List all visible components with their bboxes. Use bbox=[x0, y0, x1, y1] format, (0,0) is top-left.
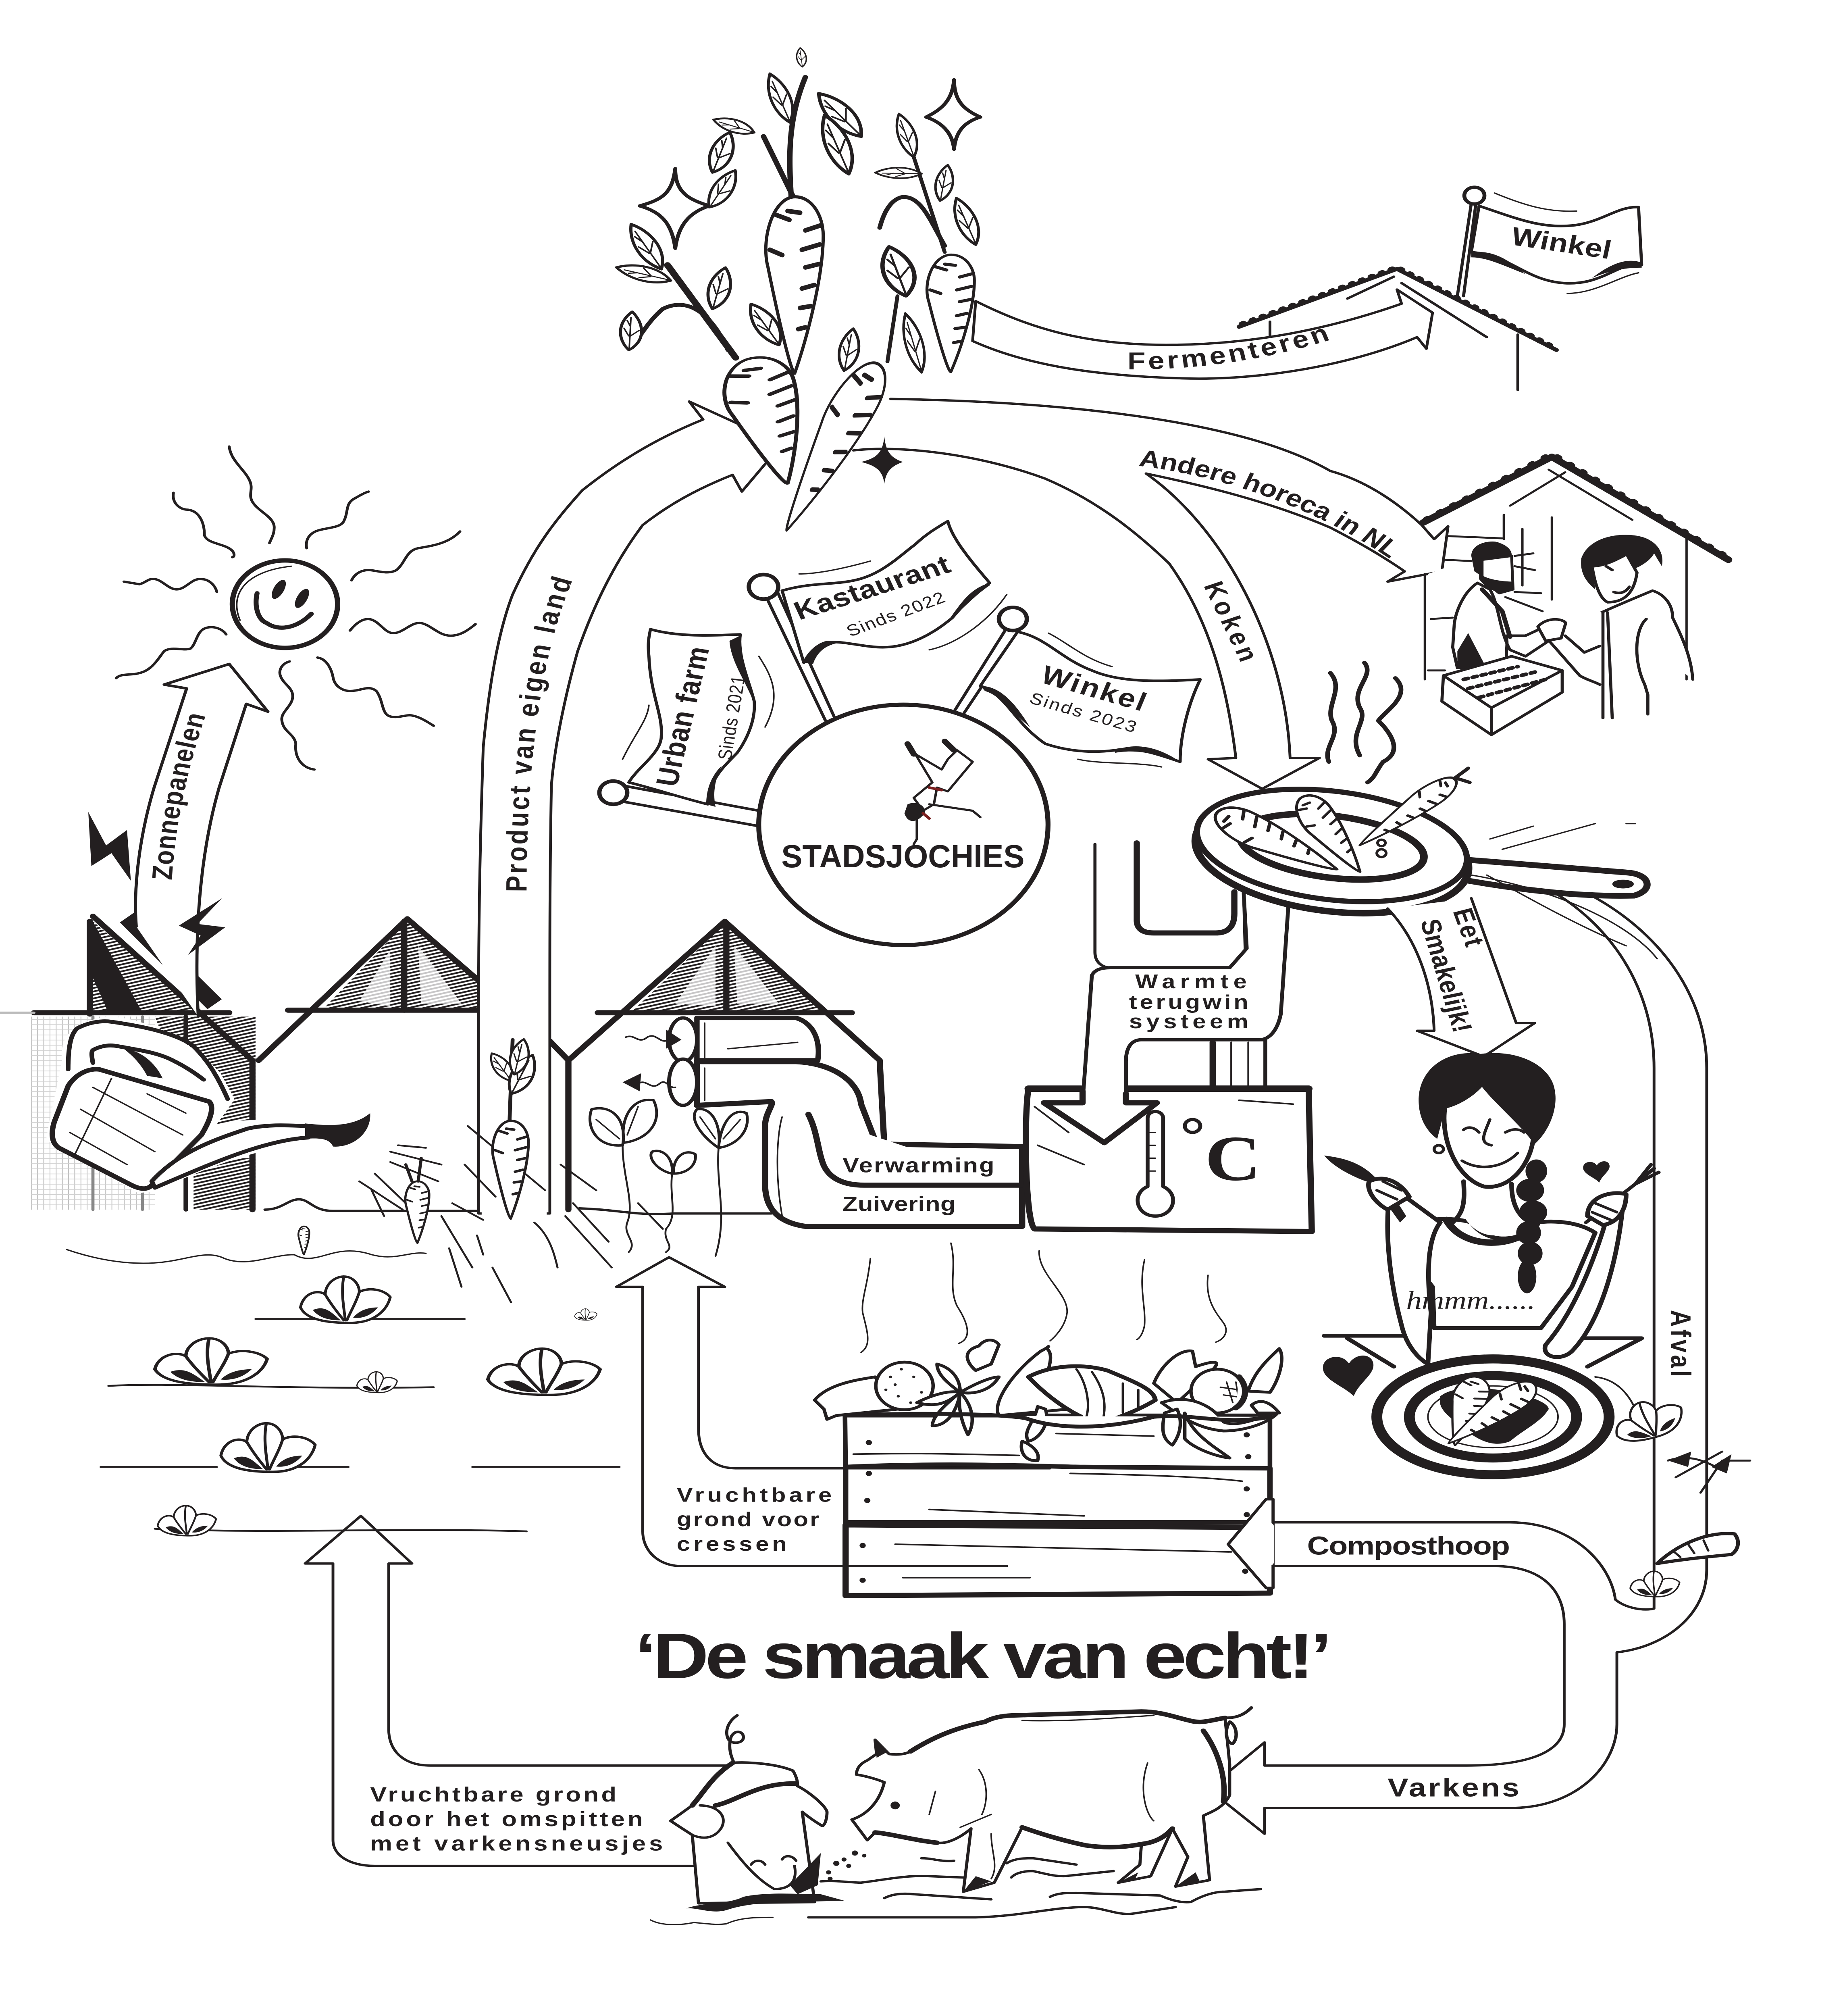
label: winkel: Winkel bbox=[1509, 221, 1614, 264]
steam bbox=[861, 1243, 1226, 1352]
arrow: koken bbox=[853, 449, 1319, 789]
arrow: andere horeca: Andere horeca in NL bbox=[1137, 444, 1406, 563]
face bbox=[1444, 1083, 1533, 1187]
star black bbox=[861, 436, 903, 484]
flag: urban farm bbox=[599, 629, 774, 826]
label: koken: Koken bbox=[1198, 578, 1264, 665]
pig big bbox=[852, 1708, 1251, 1892]
carrot in arrow bbox=[487, 1037, 545, 1218]
wooden box bbox=[681, 1416, 1270, 1596]
right carrot stalk and leaves bbox=[875, 112, 984, 372]
steam bbox=[1327, 663, 1401, 782]
label: sinds 2021: Sinds 2021 bbox=[714, 675, 749, 761]
roof bbox=[1239, 269, 1556, 350]
icon: degree bbox=[1185, 1120, 1200, 1133]
label: verwarming: Verwarming bbox=[842, 1154, 994, 1177]
label: hmmm: hmmm...... bbox=[1406, 1286, 1535, 1314]
label: warmte terugwin systeem: Warmte bbox=[1135, 970, 1247, 993]
braid bbox=[1516, 1160, 1547, 1293]
icon: heart small bbox=[1583, 1161, 1610, 1183]
left carrot stalk and leaves bbox=[614, 220, 823, 491]
label: composthoop: Composthoop bbox=[1307, 1531, 1510, 1560]
carrots top bbox=[614, 48, 984, 538]
label: winkel: Winkel bbox=[1037, 660, 1151, 716]
label: omspitten: met varkensneusjes bbox=[370, 1832, 663, 1855]
greenhouse right bbox=[550, 921, 884, 1210]
arrow: product van eigen land bbox=[478, 402, 782, 1223]
thin carrot stalk and leaves bbox=[766, 244, 929, 538]
icon: heart large bbox=[1323, 1356, 1373, 1396]
label: varkens: Varkens bbox=[1387, 1773, 1519, 1802]
person: woman bbox=[1538, 535, 1693, 718]
arrow: afval and varkens and compost band bbox=[1208, 860, 1707, 1834]
tiny carrot bbox=[298, 1227, 309, 1255]
icon: C: C bbox=[1205, 1123, 1261, 1194]
label: cressen: Vruchtbare bbox=[677, 1483, 832, 1506]
neck bbox=[1464, 1177, 1514, 1235]
greenhouses bbox=[0, 912, 884, 1210]
arrow: eet smakelijk bbox=[1387, 898, 1535, 1056]
label: sinds 2022: Sinds 2022 bbox=[843, 588, 948, 640]
arrow: fermenteren: Fermenteren bbox=[1127, 319, 1333, 375]
label: kastaurant: Kastaurant bbox=[789, 550, 955, 625]
label: andere horeca bbox=[1138, 466, 1389, 558]
logo circle bbox=[759, 705, 1048, 945]
arms bbox=[1387, 1194, 1440, 1364]
label: zonnepanelen bbox=[172, 710, 208, 880]
hand with fork bbox=[1586, 1164, 1659, 1225]
logo bbox=[599, 521, 1200, 945]
centre carrot stalk and leaves bbox=[700, 48, 869, 373]
label: eet: Eet bbox=[1447, 905, 1490, 950]
flag pole bbox=[1457, 203, 1476, 296]
person: man bbox=[1453, 541, 1556, 676]
heating pipes bbox=[622, 1018, 1022, 1227]
icon: thermometer bbox=[1138, 1112, 1173, 1216]
plate bbox=[1377, 1359, 1609, 1475]
small carrot bbox=[405, 1158, 429, 1243]
crate bbox=[1442, 656, 1562, 735]
arrow: fermenteren bbox=[973, 289, 1433, 379]
label: cressen: cressen bbox=[677, 1533, 787, 1555]
horeca house bbox=[1423, 454, 1729, 735]
hand with knife bbox=[1324, 1156, 1409, 1223]
label: warmte terugwin systeem: terugwin bbox=[1129, 991, 1248, 1013]
star left bbox=[640, 169, 709, 248]
label: warmte terugwin systeem: systeem bbox=[1129, 1010, 1248, 1033]
label: smakelijk: Smakelijk! bbox=[1414, 916, 1478, 1035]
label: product bbox=[526, 579, 573, 892]
logo text: STADSJOCHIES bbox=[781, 838, 1024, 874]
frying pan bbox=[1185, 663, 1657, 959]
label: sinds 2023: Sinds 2023 bbox=[1027, 689, 1139, 736]
compost arrow head bbox=[1228, 1499, 1273, 1588]
flag bbox=[1471, 206, 1642, 283]
shirt bbox=[1402, 1219, 1595, 1328]
pig ground lines bbox=[651, 1858, 1261, 1924]
label: urban farm: Urban farm bbox=[649, 644, 716, 789]
shop with flag bbox=[1239, 187, 1642, 390]
heat recovery system pipes bbox=[1095, 843, 1265, 1091]
arrow: zonnepanelen bbox=[135, 664, 268, 1016]
label: cressen: grond voor bbox=[677, 1508, 819, 1531]
arrow: vruchtbare grond cressen bbox=[616, 1257, 1050, 1566]
watering can bbox=[52, 1021, 370, 1189]
sun bbox=[116, 446, 475, 770]
acrobat figure bbox=[905, 741, 980, 844]
label: zuivering: Zuivering bbox=[842, 1192, 956, 1215]
arrow: andere horeca bbox=[890, 399, 1448, 582]
arrow: zonnepanelen: Zonnepanelen bbox=[146, 710, 212, 881]
ground lines bbox=[67, 1200, 771, 1531]
vegetables bbox=[815, 1340, 1282, 1461]
boiler box bbox=[1026, 892, 1312, 1231]
label: afval: Afval bbox=[1665, 1310, 1696, 1377]
arrow: product van eigen land: Product van eigen land bbox=[500, 573, 579, 892]
seedlings bbox=[590, 1100, 747, 1256]
water drops bbox=[359, 1126, 663, 1302]
lettuces bbox=[155, 1277, 600, 1536]
food scraps bbox=[1595, 1377, 1750, 1597]
label: omspitten: Vruchtbare grond bbox=[370, 1783, 616, 1806]
star right bbox=[926, 80, 980, 149]
title: ‘De smaak van echt!’ bbox=[635, 1620, 1332, 1692]
arrow: warmte bbox=[1044, 892, 1289, 1143]
compost heap bbox=[681, 1243, 1282, 1596]
arrow: vruchtbare grond varkensneusjes bbox=[305, 1516, 736, 1866]
label: fermenteren bbox=[1127, 338, 1335, 369]
hair bbox=[1419, 1053, 1556, 1145]
flag: winkel bbox=[954, 607, 1200, 767]
flag: kastaurant bbox=[749, 521, 1007, 721]
label: omspitten: door het omspitten bbox=[370, 1808, 643, 1831]
greenhouse middle bbox=[259, 919, 478, 1060]
woman eating bbox=[1323, 1053, 1659, 1396]
lightning bolts bbox=[88, 812, 225, 955]
pig small bbox=[671, 1715, 866, 1912]
greenhouse left bbox=[0, 912, 256, 1210]
